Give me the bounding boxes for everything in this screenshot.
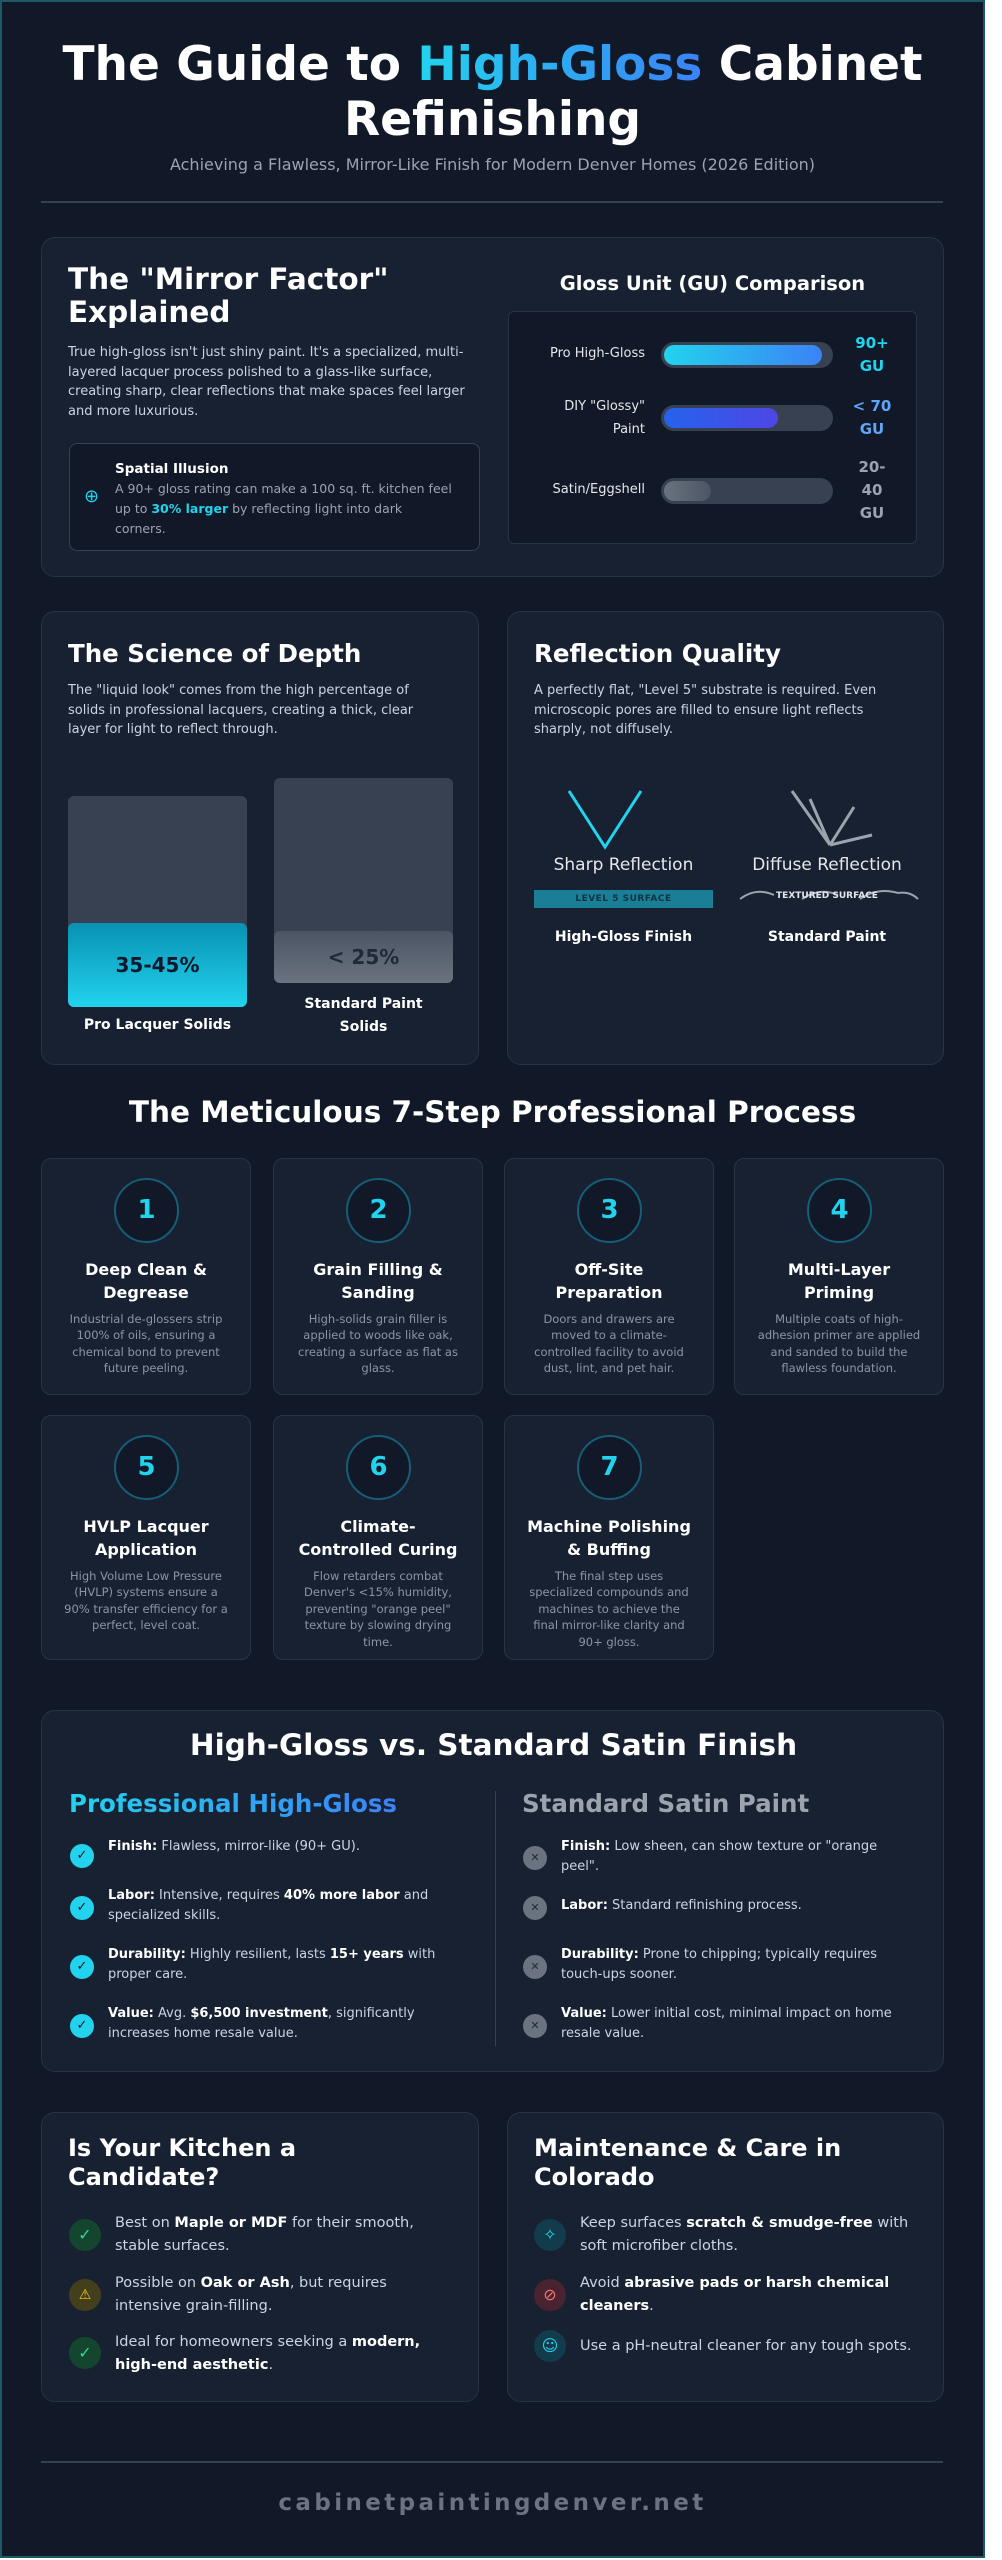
icon: diffuse lines	[790, 790, 872, 846]
bar chart: solids: Standard Paint	[304, 996, 423, 1012]
list: maintenance items	[534, 2215, 912, 2362]
heading: candidate	[68, 2134, 296, 2191]
diagram: sharp reflection: LEVEL 5 SURFACE	[575, 894, 672, 904]
step card 4: 4	[830, 1195, 849, 1225]
step card 2: Grain Filling &	[313, 1260, 443, 1279]
list: maintenance items: ⊘	[543, 2285, 557, 2304]
bar chart: solids	[68, 778, 453, 1035]
column: standard satin: Value: Lower initial cost, minimal impact on home resale value.	[561, 2006, 892, 2041]
heading: science of depth: The Science of Depth	[68, 639, 361, 668]
step card 2: 2	[369, 1195, 388, 1225]
step card 1: 1	[137, 1195, 156, 1225]
list: maintenance items: Keep surfaces scratch & smudge-free with soft microfiber cloths.	[580, 2215, 908, 2254]
bar chart: solids: Solids	[340, 1019, 387, 1035]
title	[62, 37, 923, 147]
text: reflection description: A perfectly flat, "Level 5" substrate is required. Even microscopic pores are filled to ensure light reflects sharply, not diffusely.	[534, 683, 876, 737]
heading: candidate: Candidate?	[68, 2163, 219, 2191]
step card 5: 5	[137, 1452, 156, 1482]
diagram: sharp reflection: Sharp Reflection	[554, 855, 693, 875]
step card 7	[504, 1415, 714, 1660]
bar: satin: 40	[862, 481, 882, 499]
heading: comparison: High-Gloss vs. Standard Satin Finish	[190, 1728, 797, 1762]
bar: pro high-gloss	[550, 334, 889, 375]
panel: mirror factor	[41, 237, 944, 577]
column: professional high-gloss	[69, 1789, 435, 2041]
step card 7: Machine Polishing	[527, 1517, 691, 1536]
step card 4: Multi-Layer	[788, 1260, 890, 1279]
bar: diy glossy: DIY "Glossy"	[564, 399, 645, 414]
heading: mirror factor	[68, 262, 389, 329]
column: professional high-gloss: Value: Avg. $6,500 investment, significantly increases home resale value.	[108, 2006, 415, 2041]
step card 7: The final step uses specialized compounds and machines to achieve the final mirror-like clarity and 90+ gloss.	[529, 1569, 689, 1649]
step card 1: Degrease	[103, 1283, 189, 1302]
step card 5: HVLP Lacquer	[83, 1517, 209, 1536]
title: The Guide to High-Gloss Cabinet	[62, 37, 923, 92]
column: standard satin: ✕	[530, 1901, 540, 1914]
title: Refinishing	[344, 92, 641, 147]
column: standard satin: ✕	[530, 1960, 540, 1973]
column: professional high-gloss: Durability: Highly resilient, lasts 15+ years with proper care.	[108, 1947, 435, 1982]
heading: maintenance: Colorado	[534, 2163, 655, 2191]
heading: 7-step process: The Meticulous 7-Step Professional Process	[129, 1095, 856, 1129]
diagram: diffuse reflection: TEXTURED SURFACE	[776, 891, 878, 901]
list: candidate items: ✓	[78, 2343, 92, 2362]
column: standard satin: ✕	[530, 2019, 540, 2032]
list: candidate items: Possible on Oak or Ash, but requires intensive grain-filling.	[115, 2275, 387, 2314]
step card 1: Deep Clean &	[85, 1260, 207, 1279]
icon: spatial: ⊕	[84, 486, 99, 507]
step card 6: Flow retarders combat Denver's <15% humidity, preventing "orange peel" texture by slowing drying time.	[304, 1569, 452, 1649]
diagram: sharp reflection: High-Gloss Finish	[555, 929, 692, 945]
column: professional high-gloss: ✓	[77, 2018, 87, 2033]
heading: maintenance: Maintenance & Care in	[534, 2134, 841, 2162]
step card 6: Climate-	[340, 1517, 416, 1536]
bar: diy glossy	[564, 397, 891, 438]
step card 6: Controlled Curing	[299, 1540, 457, 1559]
list: candidate items: Ideal for homeowners seeking a modern, high-end aesthetic.	[115, 2334, 420, 2373]
step card 5: Application	[95, 1540, 197, 1559]
step card 3: Off-Site	[575, 1260, 643, 1279]
list: maintenance items: ☺	[542, 2336, 558, 2355]
bar chart: solids: Pro Lacquer Solids	[84, 1017, 231, 1033]
step card 2: High-solids grain filler is applied to woods like oak, creating a surface as flat as glass.	[298, 1312, 458, 1375]
list: maintenance items: ✧	[543, 2225, 557, 2244]
heading: candidate: Is Your Kitchen a	[68, 2134, 296, 2162]
column: standard satin: Labor: Standard refinishing process.	[561, 1898, 802, 1913]
step card 2	[273, 1158, 483, 1395]
step card 4: Priming	[804, 1283, 874, 1302]
bar: pro high-gloss: 90+	[855, 334, 889, 352]
step card 5: High Volume Low Pressure (HVLP) systems ensure a 90% transfer efficiency for a perfect, level coat.	[64, 1569, 228, 1632]
bar: pro high-gloss: Pro High-Gloss	[550, 346, 645, 361]
bar: standard paint	[274, 778, 453, 983]
bar: pro lacquer	[68, 796, 247, 1007]
step card 2: Sanding	[341, 1283, 415, 1302]
subtitle: Achieving a Flawless, Mirror-Like Finish for Modern Denver Homes (2026 Edition)	[170, 155, 815, 174]
footer: website: cabinetpaintingdenver.net	[278, 2490, 707, 2516]
step card 3: 3	[600, 1195, 619, 1225]
column: standard satin: Standard Satin Paint	[522, 1789, 809, 1818]
diagram: diffuse reflection: Diffuse Reflection	[752, 855, 902, 875]
bar: satin: Satin/Eggshell	[552, 482, 645, 497]
panel: maintenance	[507, 2112, 944, 2402]
panel: reflection quality	[507, 611, 944, 1065]
step card 3	[504, 1158, 714, 1395]
bar: diy glossy: Paint	[613, 422, 645, 437]
column: standard satin: Finish: Low sheen, can show texture or "orange peel".	[561, 1839, 877, 1874]
callout: spatial illusion	[69, 443, 480, 551]
panel: comparison	[41, 1710, 944, 2072]
list: candidate items: ⚠	[79, 2287, 91, 2303]
diagram: diffuse reflection: Standard Paint	[768, 929, 886, 945]
icon: sharp V	[568, 790, 642, 850]
text: depth description: The "liquid look" comes from the high percentage of solids in professional lacquers, creating a thick, clear layer for light to reflect through.	[68, 683, 413, 737]
panel: science of depth	[41, 611, 479, 1065]
text: mirror factor description: True high-gloss isn't just shiny paint. It's a specialized, multi-layered lacquer process polished to a glass-like surface, creating sharp, clear reflections that make spaces feel larger and more luxurious.	[68, 345, 465, 419]
step card 1: Industrial de-glossers strip 100% of oils, ensuring a chemical bond to prevent future peeling.	[70, 1312, 222, 1375]
list: candidate items: ✓	[78, 2225, 92, 2244]
column: standard satin	[522, 1789, 892, 2041]
step card 6	[273, 1415, 483, 1660]
chart: gloss bars: 20-	[858, 458, 886, 476]
step card 1	[41, 1158, 251, 1395]
bar: standard paint: < 25%	[328, 945, 399, 969]
text: spatial illusion: Spatial Illusion	[115, 461, 228, 477]
column: standard satin: Durability: Prone to chipping; typically requires touch-ups sooner.	[561, 1947, 877, 1982]
column: professional high-gloss: ✓	[77, 1900, 87, 1915]
column: professional high-gloss: ✓	[77, 1848, 87, 1863]
column: professional high-gloss: Labor: Intensive, requires 40% more labor and specialized skills.	[108, 1888, 428, 1923]
chart: gloss bars	[508, 311, 917, 544]
bar: diy glossy: GU	[860, 420, 884, 438]
list: candidate items	[69, 2215, 420, 2373]
bar: pro high-gloss: GU	[860, 357, 884, 375]
heading: mirror factor: Explained	[68, 295, 231, 329]
column: professional high-gloss: Finish: Flawless, mirror-like (90+ GU).	[108, 1839, 360, 1854]
diagram: sharp reflection	[534, 790, 713, 945]
step card 6: 6	[369, 1452, 388, 1482]
panel: kitchen candidate	[41, 2112, 479, 2402]
chart: gloss bars: GU	[860, 504, 884, 522]
bar: satin	[552, 458, 886, 522]
step card 7: 7	[600, 1452, 619, 1482]
bar: pro lacquer: 35-45%	[115, 953, 200, 977]
text: spatial illusion: A 90+ gloss rating can make a 100 sq. ft. kitchen feel up to 30% larger by reflecting light into dark corners.	[115, 481, 452, 536]
step card 5	[41, 1415, 251, 1660]
bar: diy glossy: < 70	[853, 397, 891, 415]
step card 4: Multiple coats of high-adhesion primer are applied and sanded to build the flawless foundation.	[758, 1312, 920, 1375]
column: professional high-gloss: Professional High-Gloss	[69, 1789, 397, 1818]
column: professional high-gloss: ✓	[77, 1959, 87, 1974]
step card 3: Preparation	[556, 1283, 662, 1302]
heading: gloss comparison: Gloss Unit (GU) Comparison	[560, 272, 865, 295]
heading: mirror factor: The "Mirror Factor"	[68, 262, 389, 296]
diagram: diffuse reflection	[740, 790, 919, 945]
step card 4	[734, 1158, 944, 1395]
list: maintenance items: Use a pH-neutral cleaner for any tough spots.	[580, 2338, 912, 2354]
heading: maintenance	[534, 2134, 841, 2191]
heading: reflection quality: Reflection Quality	[534, 639, 781, 668]
step card 3: Doors and drawers are moved to a climate-controlled facility to avoid dust, lint, and pet hair.	[534, 1312, 684, 1375]
list: maintenance items: Avoid abrasive pads or harsh chemical cleaners.	[580, 2275, 889, 2314]
list: candidate items: Best on Maple or MDF for their smooth, stable surfaces.	[115, 2215, 414, 2254]
step card 7: & Buffing	[567, 1540, 651, 1559]
column: standard satin: ✕	[530, 1851, 540, 1864]
